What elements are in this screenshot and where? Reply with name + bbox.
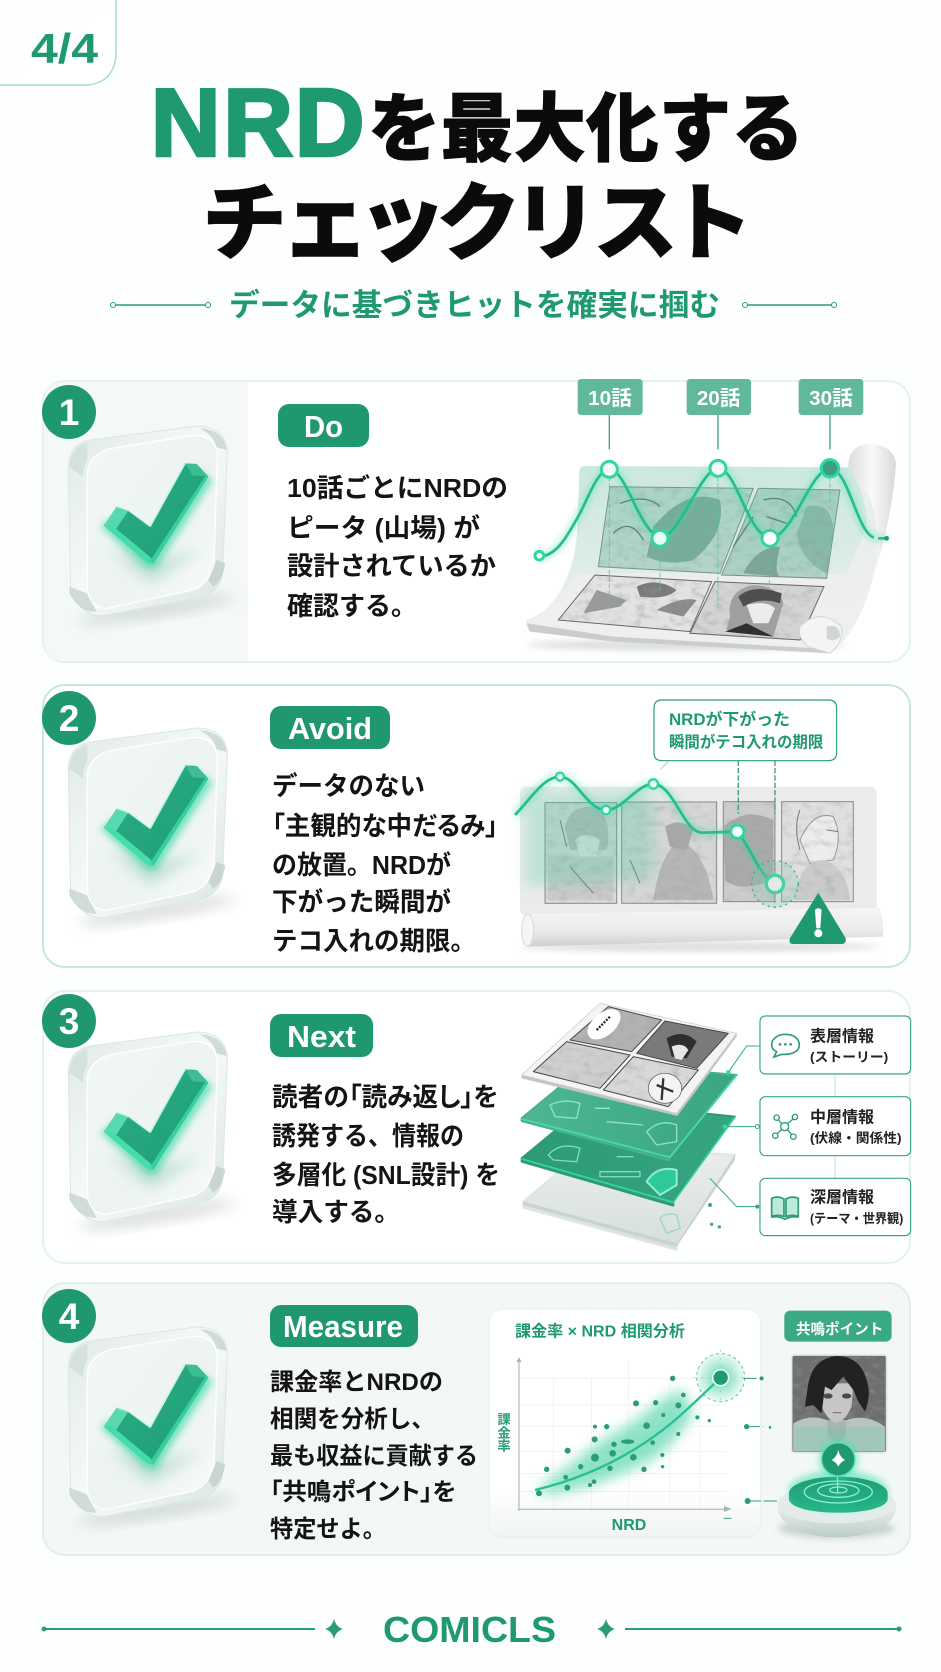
title: ェ	[280, 173, 370, 273]
text: measure description	[270, 1369, 478, 1543]
connectors	[710, 1046, 835, 1207]
number badge 1: 1	[59, 392, 79, 433]
title: ッ	[357, 173, 447, 273]
number badge 1	[42, 385, 96, 439]
panel 2: Avoid	[42, 685, 910, 967]
title: R	[224, 70, 293, 176]
trend line	[535, 1378, 720, 1490]
text: avoid description: 下がった瞬間が	[272, 887, 451, 917]
curve nodes	[556, 773, 784, 893]
text: avoid description: の放置。NRDが	[272, 850, 451, 880]
text: measure description: 課金率とNRDの	[270, 1369, 443, 1396]
panel 3: Next	[42, 991, 911, 1263]
falling NRD curve	[515, 777, 775, 884]
grid	[519, 1360, 727, 1508]
chart card	[490, 1310, 760, 1537]
callout: 瞬間がテコ入れの期限	[669, 733, 824, 752]
label 30話	[799, 379, 863, 415]
callout	[654, 700, 837, 769]
scatter dots	[536, 1376, 711, 1496]
panel 1: Do	[42, 379, 910, 662]
text: next description: 導入する。	[272, 1197, 400, 1227]
label: resonance point	[784, 1311, 892, 1342]
label 30話: 30話	[809, 387, 853, 410]
icon: speech bubble	[772, 1034, 799, 1057]
callout: NRDが下がった	[669, 710, 790, 729]
illustration: manga scroll with NRD curve	[526, 379, 896, 653]
tag: Avoid	[270, 706, 390, 749]
box: surface info	[760, 1016, 911, 1074]
text: avoid description: テコ入れの期限。	[272, 926, 476, 956]
subtitle with side rules	[110, 288, 836, 323]
text: measure description: 「共鳴ポイント」を	[270, 1479, 456, 1506]
text: next description: 読者の「読み返し」を	[272, 1082, 498, 1112]
roll	[523, 908, 883, 947]
manga panels	[598, 487, 753, 573]
panel 4: Measure	[42, 1283, 910, 1555]
box: middle info: 中層情報	[810, 1107, 874, 1126]
illustration: layered information plates	[522, 1003, 911, 1250]
x label: NRD	[612, 1517, 646, 1534]
page badge 4/4: 4/4	[31, 25, 99, 72]
text: avoid description: 「主観的な中だるみ」	[272, 811, 498, 841]
portrait	[792, 1355, 887, 1453]
icon: warning triangle	[790, 894, 845, 943]
label 20話	[687, 379, 751, 415]
drop lines	[609, 477, 830, 608]
title: ト	[668, 177, 753, 272]
number badge 4	[42, 1289, 96, 1343]
title	[151, 70, 804, 273]
pedestal	[777, 1471, 897, 1538]
number badge 4: 4	[59, 1296, 80, 1337]
box: surface info: 表層情報	[810, 1027, 874, 1046]
axes	[518, 1360, 728, 1511]
label: resonance point: 共鳴ポイント	[796, 1320, 883, 1338]
text: measure description: 相関を分析し、	[270, 1406, 435, 1433]
title: を最大化する	[368, 87, 804, 171]
tag: Do: Do	[304, 409, 343, 444]
title: リ	[513, 177, 598, 272]
title: ス	[593, 177, 678, 272]
y label: 率	[497, 1439, 511, 1454]
illustration: flattened scroll with falling NRD curve	[515, 700, 883, 951]
icon: glass check 3	[68, 1032, 237, 1235]
illustration: correlation chart and resonance point	[490, 1310, 897, 1538]
number badge 2	[42, 691, 96, 745]
label 10話	[578, 379, 643, 415]
tag: Do	[278, 404, 369, 447]
number badge 2: 2	[59, 698, 79, 739]
y label: 金	[497, 1424, 511, 1440]
manga panels	[545, 803, 617, 903]
layer: middle plate dark	[522, 1102, 735, 1206]
box: middle info: (伏線・関係性)	[810, 1129, 902, 1145]
text: avoid description: データのない	[272, 771, 425, 801]
text: measure description: 特定せよ。	[270, 1516, 386, 1543]
green tint	[525, 792, 653, 887]
text: do description	[287, 473, 508, 621]
label 20話: 20話	[697, 387, 741, 410]
medal	[818, 1439, 858, 1479]
connector ticks	[743, 1376, 787, 1504]
episode nodes	[535, 460, 839, 560]
icon: glass check 2	[68, 728, 237, 931]
text: do description: 確認する。	[287, 591, 417, 621]
icon: glass check 1	[68, 426, 237, 629]
number badge 3: 3	[59, 1001, 79, 1042]
manga ink texture	[545, 802, 853, 903]
tag: Measure: Measure	[283, 1309, 403, 1344]
roll end	[799, 617, 842, 653]
text: do description: ピータ (山場) が	[287, 513, 480, 543]
layer: deep plate	[523, 1145, 735, 1250]
box: surface info: (ストーリー)	[810, 1050, 888, 1065]
icon: open book	[772, 1197, 798, 1219]
label 10話: 10話	[588, 387, 632, 410]
footer brand: COMICLS	[383, 1609, 556, 1650]
text: avoid description	[272, 771, 498, 956]
footer brand	[42, 1609, 902, 1650]
page badge 4/4	[0, 0, 116, 85]
text: next description: 誘発する、情報の	[272, 1121, 464, 1151]
box: middle info	[760, 1097, 911, 1156]
y label: 課	[497, 1412, 511, 1427]
layer: middle plate light	[522, 1062, 737, 1161]
text: measure description: 最も収益に貢献する	[270, 1443, 478, 1470]
stems	[609, 415, 830, 449]
text: next description	[272, 1082, 500, 1227]
haze	[540, 1390, 693, 1495]
title: チ	[202, 177, 287, 272]
manga ink texture	[558, 487, 840, 640]
tag: Next: Next	[287, 1019, 356, 1054]
icon: glass check 4	[68, 1327, 237, 1530]
layer: manga page	[522, 1003, 737, 1116]
chart title: 課金率 × NRD 相関分析	[515, 1322, 685, 1341]
text: next description: 多層化 (SNL設計) を	[272, 1160, 500, 1190]
text: do description: 設計されているか	[287, 551, 496, 581]
y label	[497, 1412, 511, 1454]
title: ク	[436, 177, 521, 272]
box: deep info: 深層情報	[810, 1187, 874, 1206]
title: N	[151, 70, 220, 176]
box: deep info	[760, 1178, 911, 1236]
connector lines	[738, 761, 775, 813]
tag: Next	[270, 1014, 373, 1057]
icon: network nodes	[773, 1114, 798, 1139]
tag: Avoid: Avoid	[288, 711, 372, 746]
green tint	[553, 466, 867, 607]
text: do description: 10話ごとにNRDの	[287, 473, 508, 503]
subtitle with side rules: データに基づきヒットを確実に掴む	[229, 288, 720, 323]
number badge 3	[42, 994, 96, 1048]
box: deep info: (テーマ・世界観)	[810, 1210, 903, 1226]
NRD curve	[538, 468, 887, 557]
title: D	[295, 70, 364, 176]
